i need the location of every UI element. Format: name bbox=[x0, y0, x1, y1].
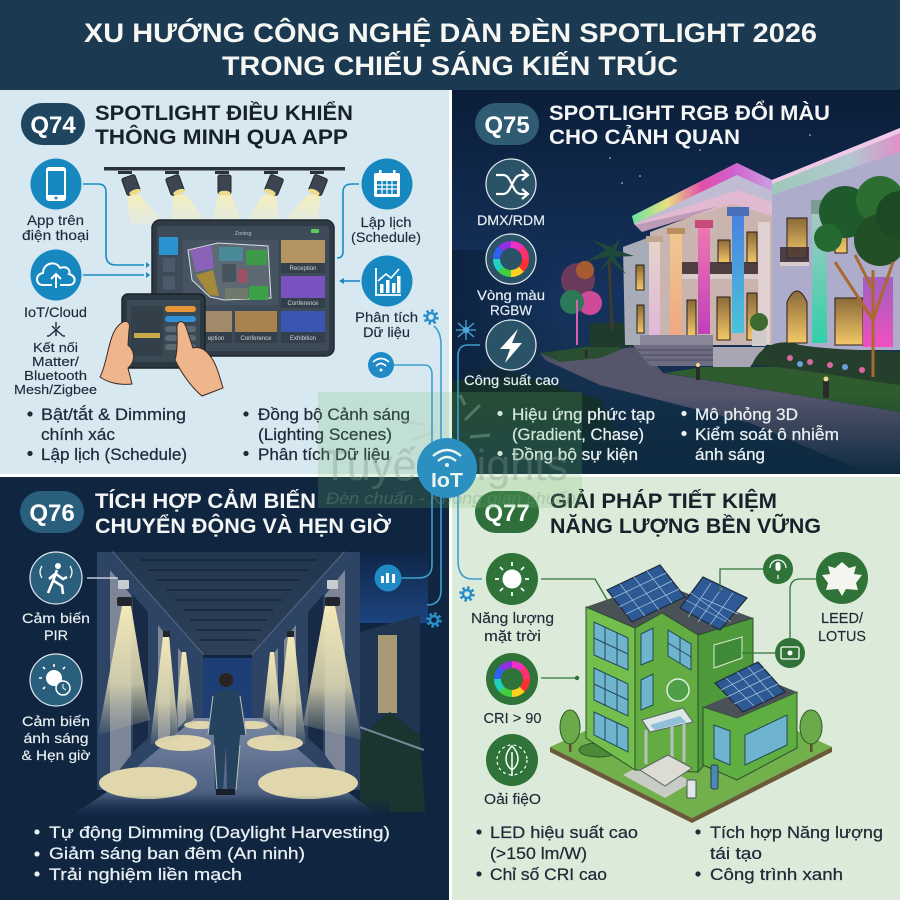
heading Q74 bbox=[95, 102, 353, 149]
label: light sensor bbox=[22, 713, 90, 763]
bullets Q77 right bbox=[696, 824, 883, 884]
scene thumbnails: Conference bbox=[287, 301, 319, 307]
building right bbox=[360, 615, 420, 800]
label: app: điện thoại bbox=[22, 227, 89, 243]
badge Q74: Q74 bbox=[30, 112, 76, 139]
watermark: Tuyến Lights bbox=[322, 441, 568, 490]
label: leaf: Oải fiệO bbox=[484, 792, 541, 808]
label: schedule: (Schedule) bbox=[351, 229, 421, 245]
bullets Q75 right: Mô phỏng 3D bbox=[695, 406, 798, 424]
label: light sensor: ánh sáng bbox=[24, 730, 88, 746]
callout lines bbox=[541, 569, 816, 678]
capitals bbox=[646, 200, 828, 242]
badge Q76 bbox=[20, 491, 84, 533]
icon: cloud bbox=[30, 250, 82, 300]
windows bbox=[594, 622, 691, 752]
badge Q75 bbox=[475, 103, 539, 145]
annex bbox=[703, 692, 797, 780]
center face bbox=[635, 613, 698, 772]
label: light sensor: & Hẹn giờ bbox=[22, 747, 90, 763]
portico wall bbox=[650, 200, 772, 345]
walkway bbox=[623, 760, 692, 798]
bullets Q74 left: Bật/tắt & Dimming bbox=[41, 405, 186, 424]
label: CRI: CRI > 90 bbox=[484, 711, 542, 727]
bullets Q74 right: (Lighting Scenes) bbox=[258, 426, 392, 444]
colour tree left bbox=[560, 261, 602, 345]
floor bbox=[72, 718, 378, 815]
icon: CRI ring bbox=[486, 653, 538, 705]
wall lights and sensors bbox=[117, 580, 340, 637]
palm tree bbox=[585, 238, 634, 330]
bullets Q74 right bbox=[244, 406, 410, 464]
label: connectivity: Mesh/Zigbee bbox=[14, 382, 97, 397]
green building illustration bbox=[541, 565, 832, 823]
icon: bars small bbox=[374, 564, 402, 592]
IoT hub: IoT bbox=[431, 470, 463, 492]
label: schedule bbox=[351, 214, 421, 245]
heading Q77: GIẢI PHÁP TIẾT KIỆM bbox=[550, 489, 777, 513]
label: app: App trên bbox=[27, 212, 84, 228]
heading Q76: CHUYỂN ĐỘNG VÀ HẸN GIỜ bbox=[95, 514, 391, 538]
title: TRONG CHIẾU SÁNG KIẾN TRÚC bbox=[222, 50, 678, 81]
track lights with beams bbox=[104, 167, 345, 224]
tablet dashboard bbox=[152, 220, 334, 356]
phone tablet with hands bbox=[100, 294, 223, 396]
icon: analytics chart bbox=[362, 256, 412, 306]
left face bbox=[586, 607, 635, 770]
label: analytics: Phân tích bbox=[355, 309, 418, 325]
bullets Q77 left: LED hiệu suất cao bbox=[490, 824, 638, 842]
label: analytics: Dữ liệu bbox=[363, 324, 410, 340]
screen title: Zoning bbox=[235, 231, 251, 237]
badge Q75: Q75 bbox=[484, 112, 530, 139]
watermark: Đèn chuẩn - Không gian chuẩn bbox=[326, 489, 576, 508]
hedge bbox=[590, 323, 635, 347]
sign bbox=[714, 637, 742, 668]
panel: Q75 RGB landscape bbox=[452, 90, 900, 474]
scene thumbnails: Exhibition bbox=[290, 336, 316, 342]
header band bbox=[0, 0, 900, 90]
watermark bbox=[318, 392, 582, 508]
IoT network lines bbox=[394, 326, 482, 605]
label: IoT cloud: IoT/Cloud bbox=[24, 304, 87, 320]
icon: wifi small bbox=[368, 352, 394, 378]
label: connectivity: Matter/ bbox=[32, 354, 79, 369]
badge Q77: Q77 bbox=[484, 500, 530, 527]
label: solar bbox=[471, 611, 554, 645]
roof bbox=[586, 582, 753, 635]
bullets Q77 left: Chỉ số CRI cao bbox=[490, 866, 607, 884]
bullets Q76: Trải nghiệm liền mạch bbox=[49, 865, 242, 884]
left wall bbox=[97, 552, 203, 790]
icon: gear Q74 bbox=[425, 311, 437, 323]
panel: Q74 smart app control bbox=[0, 90, 449, 474]
bullets Q75 right: ánh sáng bbox=[695, 446, 765, 464]
steps bbox=[640, 335, 713, 347]
bullets Q74 right: Đồng bộ Cảnh sáng bbox=[258, 406, 410, 424]
heading Q74: THÔNG MINH QUA APP bbox=[95, 125, 348, 149]
heading Q77 bbox=[550, 489, 821, 538]
garden lamps bbox=[585, 350, 829, 398]
windows bbox=[687, 205, 863, 345]
label: PIR bbox=[22, 610, 90, 643]
person walking bbox=[208, 673, 246, 795]
badge Q76: Q76 bbox=[29, 500, 75, 527]
icon: microphone bbox=[763, 554, 793, 584]
icon: PIR motion bbox=[30, 552, 82, 604]
icon: high power bolt bbox=[486, 320, 536, 370]
bullets Q77 right: Tích hợp Năng lượng bbox=[710, 824, 883, 842]
light pools bbox=[99, 721, 358, 799]
bullets Q75 right: Kiểm soát ô nhiễm bbox=[695, 425, 839, 444]
side fade bbox=[452, 250, 562, 380]
icon: connection nodes bbox=[47, 322, 65, 336]
bullets Q75 left: Hiệu ứng phức tạp bbox=[512, 406, 655, 424]
bullets Q76 bbox=[34, 823, 390, 884]
light cones bbox=[98, 606, 150, 735]
label: connectivity: Kết nối bbox=[33, 340, 78, 355]
side wing bbox=[623, 237, 650, 345]
label: LEED: LEED/ bbox=[821, 611, 864, 627]
label: analytics bbox=[355, 309, 418, 340]
bullets Q75 left: (Gradient, Chase) bbox=[512, 426, 644, 444]
solar panels bbox=[607, 565, 785, 712]
label: DMX: DMX/RDM bbox=[477, 212, 545, 228]
portico bbox=[640, 708, 693, 786]
bush bbox=[579, 743, 619, 757]
heading Q75: CHO CẢNH QUAN bbox=[549, 126, 740, 149]
bullets Q74 right: Phân tích Dữ liệu bbox=[258, 446, 390, 464]
bullets Q77 right: tái tạo bbox=[710, 845, 762, 863]
badge Q74 bbox=[21, 103, 85, 145]
scene thumbnails: Reception bbox=[289, 266, 317, 272]
heading Q74: SPOTLIGHT ĐIỀU KHIỂN bbox=[95, 102, 353, 125]
wall panels bbox=[110, 570, 345, 782]
icon: DMX shuffle bbox=[486, 159, 536, 209]
bullets Q75 left: Đồng bộ sự kiện bbox=[512, 446, 638, 464]
icon: gear Q77 bbox=[461, 588, 473, 600]
label: LEED: LOTUS bbox=[818, 629, 866, 645]
scene thumbnails bbox=[204, 240, 325, 343]
bullets Q77 right: Công trình xanh bbox=[710, 866, 843, 884]
RGB mansion illustration bbox=[452, 128, 900, 474]
lamp glows bbox=[696, 363, 828, 382]
label: RGBW: Vòng màu bbox=[477, 287, 545, 303]
bullets Q77 left: (>150 lm/W) bbox=[490, 845, 587, 863]
label: connectivity: Bluetooth bbox=[24, 368, 87, 383]
label: connectivity bbox=[14, 340, 97, 397]
label: PIR: PIR bbox=[44, 627, 68, 643]
icon: meter bbox=[775, 638, 805, 668]
large tree right bbox=[814, 176, 900, 377]
planter bbox=[750, 313, 768, 346]
building emblem bbox=[667, 679, 689, 701]
title: XU HƯỚNG CÔNG NGHỆ DÀN ĐÈN SPOTLIGHT 2026 bbox=[84, 17, 817, 48]
lawn right bbox=[665, 367, 900, 412]
charger bbox=[687, 765, 718, 798]
connector lines bbox=[83, 184, 360, 284]
bullets Q76: Giảm sáng ban đêm (An ninh) bbox=[49, 844, 305, 863]
bullets Q77 left bbox=[476, 824, 638, 884]
label: solar: mặt trời bbox=[484, 629, 541, 645]
heading Q76: TÍCH HỢP CẢM BIẾN bbox=[95, 490, 316, 513]
label: LEED bbox=[818, 611, 866, 645]
heading Q77: NĂNG LƯỢNG BỀN VỮNG bbox=[550, 514, 821, 538]
scene thumbnails: eption bbox=[208, 336, 224, 342]
label: RGBW bbox=[477, 287, 545, 318]
flower beds bbox=[752, 342, 900, 385]
stars bbox=[609, 134, 811, 184]
badge Q77 bbox=[475, 491, 539, 533]
icon: RGBW colour ring bbox=[486, 234, 536, 284]
icon: leaf bbox=[486, 734, 538, 786]
trees bbox=[560, 710, 822, 752]
IoT hub bbox=[417, 438, 477, 498]
label: app bbox=[22, 212, 89, 243]
lawn left bbox=[540, 345, 625, 362]
label: solar: Năng lượng bbox=[471, 611, 554, 627]
title bbox=[84, 17, 817, 81]
bullets Q75 left bbox=[498, 406, 655, 464]
ceiling bbox=[112, 552, 345, 655]
railing right bbox=[354, 725, 424, 750]
bullets Q74 left: Lập lịch (Schedule) bbox=[41, 446, 187, 464]
icon: hub snowflake bbox=[456, 320, 476, 340]
heading Q76 bbox=[95, 490, 391, 538]
bottom fade bbox=[452, 395, 900, 474]
night sky right bbox=[360, 553, 428, 623]
back window bbox=[203, 658, 252, 718]
corridor illustration bbox=[60, 552, 428, 820]
icon: LEED leaf bbox=[816, 552, 868, 604]
label: PIR: Cảm biến bbox=[22, 610, 90, 626]
scene thumbnails: Conference bbox=[240, 336, 272, 342]
icon: calendar bbox=[362, 158, 412, 210]
sensor link bbox=[87, 577, 118, 579]
pediment bbox=[632, 163, 772, 225]
bushes right bbox=[360, 712, 425, 812]
label: light sensor: Cảm biến bbox=[22, 713, 90, 729]
label: RGBW: RGBW bbox=[490, 302, 533, 318]
right wing wall bbox=[772, 130, 900, 350]
bullets Q74 left: chính xác bbox=[41, 426, 115, 444]
balcony rails bbox=[682, 247, 809, 274]
icon: sun bbox=[486, 553, 538, 605]
bullets Q75 right bbox=[682, 406, 839, 464]
floor plan bbox=[183, 240, 278, 305]
heading Q75 bbox=[549, 101, 830, 149]
right wall bbox=[252, 552, 360, 790]
icon: light sensor and timer bbox=[30, 654, 82, 706]
ground base bbox=[550, 682, 832, 818]
heading Q75: SPOTLIGHT RGB ĐỔI MÀU bbox=[549, 101, 830, 125]
panel: Q77 sustainable energy bbox=[452, 477, 900, 900]
columns bbox=[649, 240, 660, 335]
icon: app on phone bbox=[30, 158, 82, 210]
icon: gear Q76 bbox=[428, 614, 440, 626]
right face bbox=[698, 618, 753, 772]
bullets Q74 left bbox=[28, 405, 187, 464]
bullets Q76: Tự động Dimming (Daylight Harvesting) bbox=[49, 823, 390, 842]
walkway bbox=[540, 347, 900, 474]
label: high power: Công suất cao bbox=[464, 372, 559, 388]
fade bottom bbox=[60, 795, 390, 820]
label: schedule: Lập lịch bbox=[360, 214, 412, 230]
panel: Q76 sensors bbox=[0, 477, 449, 900]
